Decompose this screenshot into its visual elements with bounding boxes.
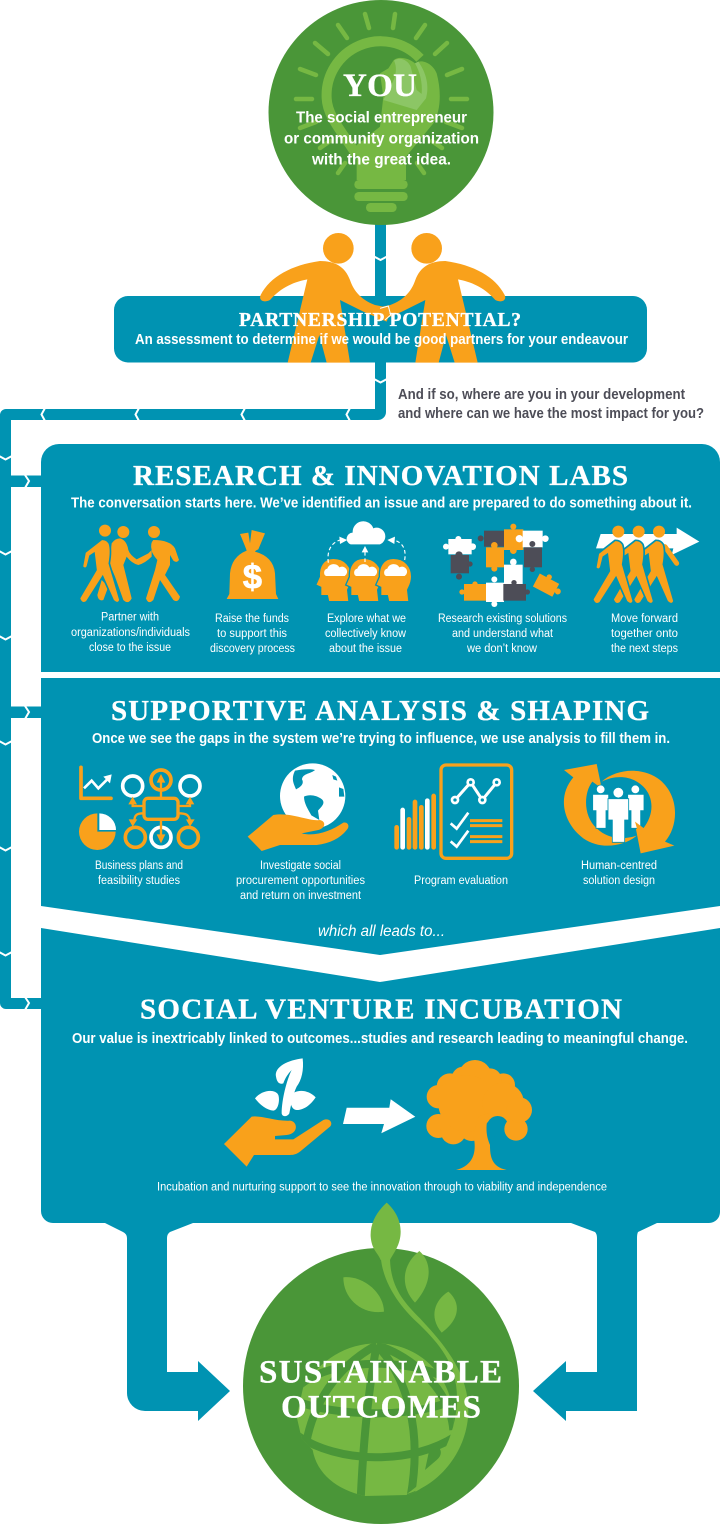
heading: sustainable outcomes: OUTCOMES	[281, 1390, 481, 1426]
label: raise funds: to support this	[217, 628, 287, 640]
icon: partners walking	[79, 525, 180, 603]
label: move forward: the next steps	[611, 643, 678, 655]
label: partner: organizations/individuals	[71, 627, 190, 639]
label: research: Research existing solutions	[438, 613, 567, 625]
panel: social venture incubation with arrows	[41, 928, 720, 1421]
label: move forward	[611, 613, 678, 655]
heading: you: YOU	[343, 68, 417, 104]
label: investigate: Investigate social	[260, 860, 341, 872]
icon: program evaluation	[397, 765, 512, 858]
icon: money bag: $	[243, 559, 262, 597]
label: raise funds: discovery process	[210, 643, 295, 655]
heading: supportive analysis and shaping: SUPPORTIVE ANALYSIS & SHAPING	[111, 695, 649, 727]
label: business plans: Business plans and	[95, 860, 183, 872]
label: research	[438, 613, 567, 655]
label: move forward: together onto	[611, 628, 678, 640]
label: raise funds	[210, 613, 295, 655]
label: investigate: and return on investment	[240, 890, 362, 902]
icon: light bulb	[296, 14, 467, 212]
heading: social venture incubation: SOCIAL VENTURE INCUBATION	[140, 994, 622, 1026]
label: human-centred: Human-centred	[581, 860, 657, 872]
connector path	[0, 220, 387, 1010]
arrow: sprout to tree	[343, 1099, 415, 1133]
text: which all leads to: which all leads to...	[318, 923, 445, 940]
label: partner	[71, 612, 190, 654]
label: explore	[325, 613, 407, 655]
heading: sustainable outcomes: SUSTAINABLE	[259, 1355, 502, 1391]
text: and if so	[398, 387, 704, 422]
label: incubation: Incubation and nurturing support to see the innovation through to viability and independence	[157, 1182, 607, 1194]
label: partner: close to the issue	[89, 642, 171, 654]
icon: human-centred design	[564, 764, 675, 853]
text: you description: with the great idea.	[311, 152, 451, 169]
panel: partnership potential	[114, 296, 647, 362]
icon: heads and cloud	[316, 521, 412, 602]
label: partner: Partner with	[101, 612, 159, 624]
icon: globe and plant	[287, 1203, 468, 1503]
panel: research and innovation labs	[41, 444, 720, 672]
panel: supportive analysis and shaping	[41, 678, 720, 955]
text: supportive intro: Once we see the gaps in the system we’re trying to influence, we use analysis to fill them in.	[92, 731, 670, 747]
text: you description	[284, 110, 479, 169]
heading: sustainable outcomes	[259, 1355, 502, 1426]
arrow: right into outcomes	[533, 1361, 637, 1421]
icon: walkers and arrow	[593, 526, 699, 604]
label: business plans: feasibility studies	[98, 875, 180, 887]
text: partnership description: An assessment to determine if we would be good partners for your endeavour	[135, 332, 628, 348]
label: program evaluation: Program evaluation	[414, 875, 508, 887]
icon: globe in hand	[248, 763, 348, 851]
icon: tree	[426, 1060, 532, 1170]
label: business plans	[95, 860, 183, 887]
label: human-centred: solution design	[583, 875, 655, 887]
label: investigate	[236, 860, 365, 902]
icon: puzzle pieces	[443, 524, 566, 607]
icon: business plan diagrams	[79, 767, 200, 850]
label: explore: about the issue	[329, 643, 402, 655]
text: you description: The social entrepreneur	[296, 110, 467, 127]
heading: partnership potential: PARTNERSHIP POTENTIAL?	[239, 310, 521, 331]
circle: sustainable outcomes	[243, 1248, 519, 1524]
label: investigate: procurement opportunities	[236, 875, 365, 887]
label: explore: Explore what we	[327, 613, 406, 625]
label: move forward: Move forward	[611, 613, 678, 625]
heading: research and innovation labs: RESEARCH & INNOVATION LABS	[133, 460, 628, 492]
label: research: we don’t know	[466, 643, 538, 655]
label: research: and understand what	[452, 628, 554, 640]
text: you description: or community organization	[284, 131, 479, 148]
label: raise funds: Raise the funds	[215, 613, 289, 625]
text: and if so: And if so, where are you in your development	[398, 387, 685, 403]
circle: you	[268, 0, 494, 225]
icon: money bag	[227, 530, 278, 599]
icon: sprout in hand	[224, 1058, 331, 1167]
label: human-centred	[581, 860, 657, 887]
label: explore: collectively know	[325, 628, 407, 640]
icon: two people shaking hands	[260, 233, 505, 363]
